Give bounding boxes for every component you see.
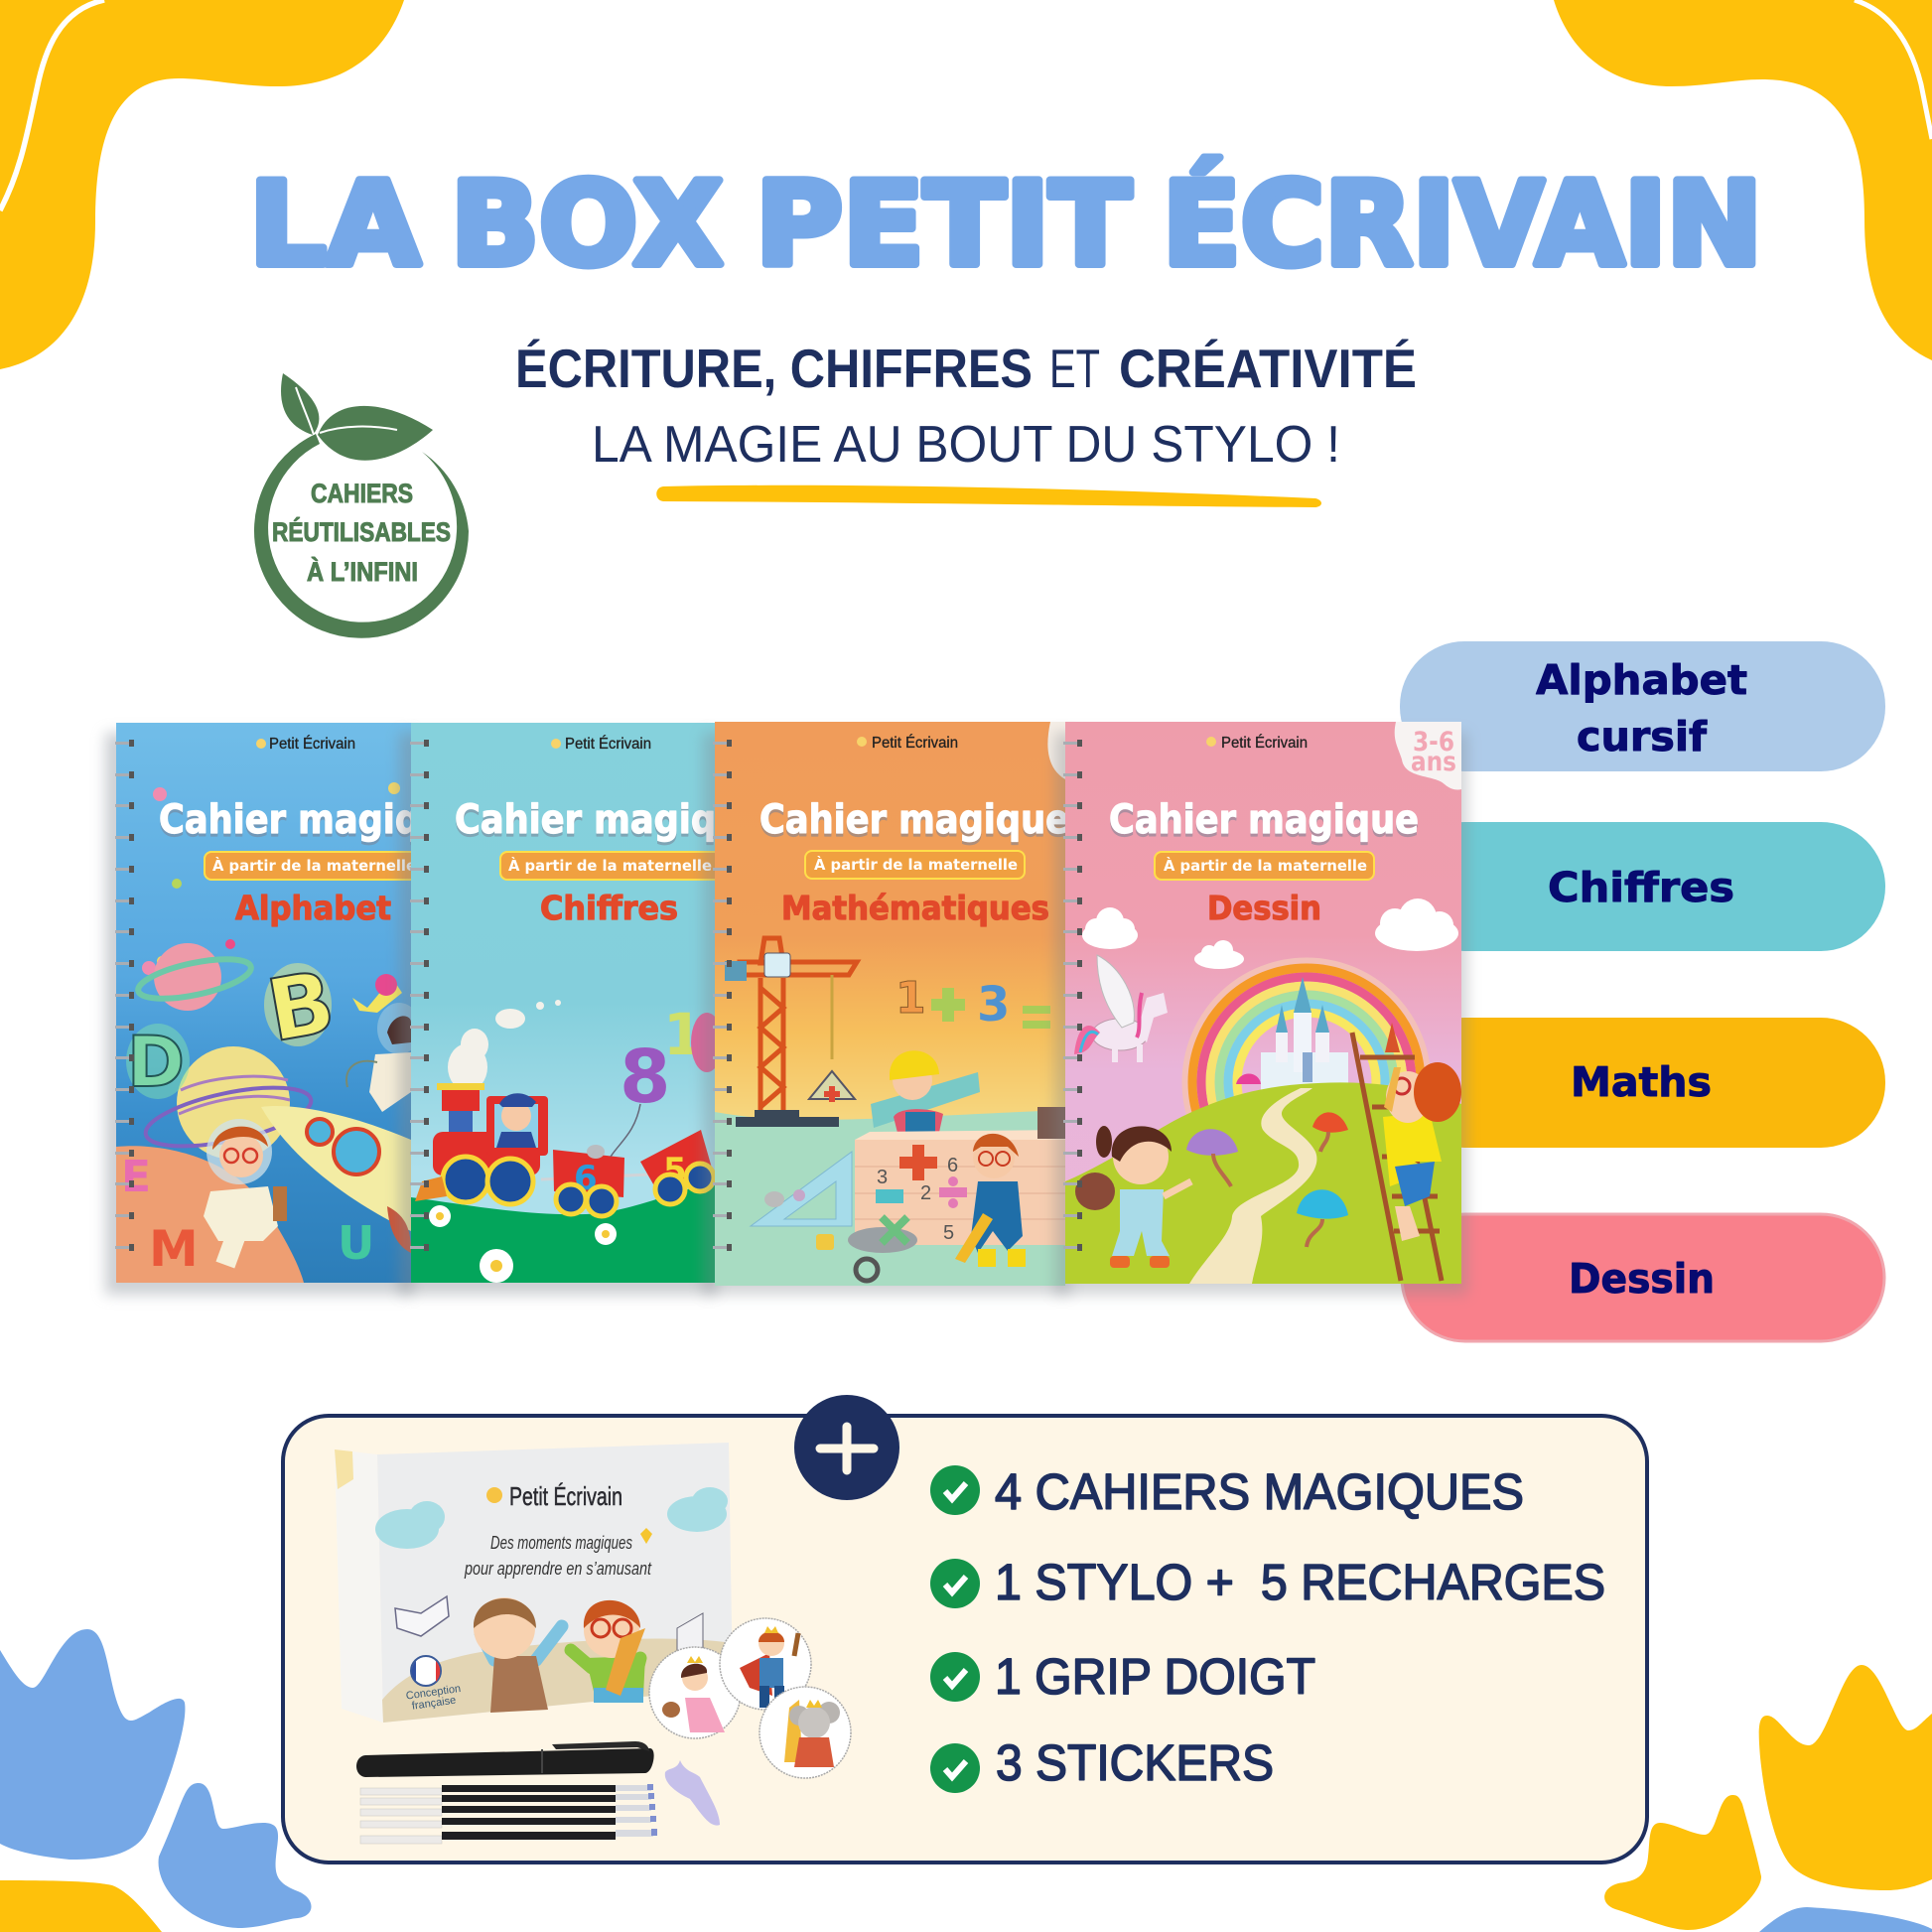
cover title: Cahier magique	[759, 797, 1069, 843]
stickers	[649, 1618, 851, 1778]
subtitle line 2: LA MAGIE AU BOUT DU STYLO !	[592, 416, 1340, 474]
product box: pour apprendre en s’amusant	[464, 1559, 652, 1579]
logo	[857, 734, 957, 749]
age pill	[1155, 852, 1374, 880]
subtitle line 1: ÉCRITURE, CHIFFRES	[515, 338, 1033, 399]
age tab	[1395, 722, 1461, 789]
subject: Mathématiques	[781, 889, 1049, 927]
illustration: train: 5	[663, 1151, 687, 1190]
subtitle line 1	[515, 338, 1417, 399]
illustration: construction site: 3	[977, 977, 1010, 1033]
illustration: construction site: 6	[947, 1155, 958, 1176]
subject: Alphabet	[235, 889, 391, 927]
logo: Petit Écrivain	[872, 733, 958, 752]
sticker: prince	[720, 1618, 811, 1710]
logo	[551, 735, 651, 749]
item: 4 cahiers magiques: 4 CAHIERS MAGIQUES	[995, 1463, 1524, 1520]
badge text: À L’INFINI	[307, 556, 418, 587]
logo: Petit Écrivain	[269, 734, 355, 753]
illustration: train: 6	[574, 1159, 598, 1198]
pill: Dessin	[1402, 1214, 1884, 1341]
logo: Petit Écrivain	[565, 734, 651, 753]
cover title: Cahier magique	[159, 797, 469, 843]
badge: reusable notebooks	[254, 373, 469, 638]
pill: Dessin: Dessin	[1569, 1255, 1715, 1303]
illustration: construction site	[725, 938, 1065, 1281]
age pill: À partir de la maternelle	[1164, 856, 1367, 875]
pill: Chiffres	[1400, 822, 1885, 951]
illustration: construction site: 1	[896, 973, 926, 1024]
panel: box contents	[283, 1416, 1647, 1863]
notebook: Dessin	[1054, 722, 1467, 1295]
age pill: À partir de la maternelle	[212, 856, 416, 875]
logo	[1206, 734, 1307, 749]
age pill	[205, 852, 425, 880]
finger grip	[665, 1760, 720, 1826]
product box: Petit Écrivain	[509, 1481, 622, 1511]
illustration: construction site: 2	[920, 1182, 931, 1204]
age tab: ans	[1411, 747, 1456, 777]
refill row 3	[360, 1804, 655, 1816]
illustration: space scene: U	[338, 1216, 374, 1270]
pill: Chiffres: Chiffres	[1548, 864, 1734, 911]
cover title: Cahier magique	[1109, 797, 1419, 843]
illustration: train: 8	[620, 1035, 671, 1120]
badge text: CAHIERS	[311, 479, 413, 508]
item: 1 stylo + 5 recharges: 1 STYLO + 5 RECHARGES	[995, 1554, 1605, 1610]
pill: Alphabet cursif: cursif	[1577, 713, 1708, 760]
subtitle line 1: ET	[1049, 338, 1100, 399]
logo: Petit Écrivain	[1221, 733, 1308, 752]
sticker: mouse	[759, 1687, 851, 1778]
illustration: construction site: 5	[943, 1222, 954, 1244]
product box	[335, 1443, 733, 1723]
product box: Des moments magiques	[490, 1533, 632, 1553]
age pill	[805, 851, 1025, 879]
item: 1 grip doigt: 1 GRIP DOIGT	[995, 1648, 1315, 1705]
cover title: Cahier magique	[455, 797, 764, 843]
sticker: princess	[649, 1647, 741, 1738]
illustration: space scene	[116, 782, 421, 1283]
yellow brush underline	[656, 485, 1321, 507]
pen	[356, 1741, 654, 1777]
refill row 5	[360, 1829, 657, 1844]
illustration: train: 1	[663, 1001, 703, 1068]
illustration: train	[415, 1000, 723, 1283]
illustration: space scene: D	[127, 1022, 185, 1103]
refill row 1	[360, 1784, 653, 1795]
pill: Alphabet cursif	[1400, 641, 1885, 771]
notebook: Mathématiques	[703, 722, 1070, 1295]
illustration: space scene: B	[260, 953, 342, 1061]
item: 3 stickers: 3 STICKERS	[996, 1734, 1274, 1791]
ground	[411, 1181, 715, 1283]
badge text	[272, 479, 451, 587]
mint ground	[715, 1110, 1065, 1286]
notebook: Chiffres	[399, 723, 764, 1295]
refill row 4	[360, 1816, 656, 1828]
product box: Conception	[405, 1683, 462, 1703]
plus badge	[794, 1395, 899, 1500]
decoration: top-left yellow wave	[0, 0, 404, 369]
checklist	[930, 1463, 1605, 1793]
pill: Maths	[1400, 1018, 1885, 1148]
badge text: RÉUTILISABLES	[272, 516, 451, 547]
decoration: bottom-left crowns	[0, 1629, 312, 1932]
subtitle line 1: CRÉATIVITÉ	[1119, 338, 1417, 399]
logo	[256, 735, 355, 749]
pill: Alphabet cursif: Alphabet	[1536, 656, 1747, 704]
pill: Maths: Maths	[1571, 1058, 1712, 1106]
refill row 2	[360, 1793, 654, 1805]
title	[249, 157, 1762, 292]
corner tab	[1047, 722, 1065, 779]
decoration: bottom-right crowns	[1604, 1665, 1932, 1932]
illustration: space scene: M	[149, 1220, 199, 1278]
title: PETIT	[756, 158, 1131, 292]
title: ÉCRIVAIN	[1163, 157, 1762, 292]
badge leaves	[281, 373, 433, 461]
title: BOX	[451, 158, 723, 292]
refills	[360, 1784, 657, 1844]
subject: Chiffres	[540, 889, 678, 927]
title: LA	[249, 158, 420, 292]
illustration: space scene: E	[121, 1152, 151, 1202]
notebook: Alphabet	[99, 723, 417, 1301]
age tab: 3-6	[1413, 727, 1454, 758]
product box: française	[411, 1695, 457, 1713]
age pill: À partir de la maternelle	[814, 855, 1018, 874]
subject: Dessin	[1207, 889, 1321, 927]
age pill	[500, 852, 721, 880]
decoration: top-right yellow wave	[1554, 0, 1932, 360]
badge ring	[254, 434, 469, 638]
illustration: construction site: 3	[877, 1167, 888, 1188]
age pill: À partir de la maternelle	[508, 856, 712, 875]
illustration: rainbow and hill	[1065, 898, 1461, 1284]
